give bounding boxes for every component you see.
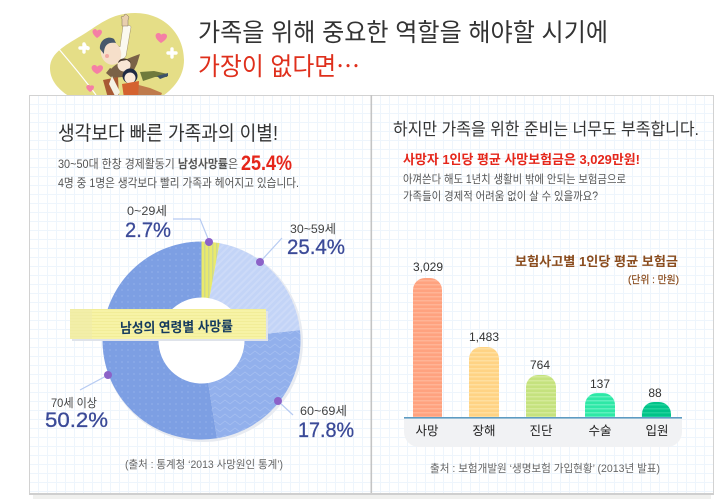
left intro text [58, 152, 299, 190]
bar chart [404, 260, 682, 447]
bar: diagnosis [526, 358, 556, 438]
left intro text: 25.4% [241, 152, 292, 175]
banner: male death rate by age: 남성의 연령별 사망률 [120, 318, 233, 336]
left source: (출처 : 통계청 ‘2013 사망원인 통계’) [125, 458, 283, 471]
chart title [515, 254, 679, 286]
callout: 60-69 [274, 397, 354, 442]
bar: disability: 1,483 [469, 330, 499, 344]
callout: 30-59: 25.4% [287, 236, 345, 259]
panel: right, insurance payouts [393, 120, 699, 475]
callout: 60-69: 17.8% [298, 419, 354, 442]
bar: death [413, 260, 443, 438]
callout: 30-59: 30~59세 [290, 222, 336, 236]
callout: 70 plus: 70세 이상 [51, 396, 97, 410]
title [198, 19, 608, 81]
callout: 70 plus: 50.2% [45, 409, 108, 432]
bar: surgery: 137 [590, 377, 610, 391]
bar: hospitalization [642, 386, 671, 438]
callout: 30-59 [256, 222, 345, 266]
bar: death: 3,029 [413, 260, 443, 274]
right source: 출처 : 보험개발원 ‘생명보험 가입현황’ (2013년 발표) [430, 462, 660, 475]
bar: hospitalization: 입원 [645, 424, 669, 438]
right intro text [403, 152, 640, 203]
right heading: 하지만 가족을 위한 준비는 너무도 부족합니다. [393, 120, 699, 139]
left heading: 생각보다 빠른 가족과의 이별! [58, 122, 278, 145]
callout: 0-29 [125, 204, 213, 246]
title: 가장이 없다면⋯ [198, 53, 360, 81]
bar: diagnosis: 진단 [529, 424, 553, 438]
banner: male death rate by age [70, 309, 268, 341]
donut chart [102, 241, 303, 442]
bar: disability [469, 330, 499, 438]
bar: death: 사망 [415, 424, 439, 438]
chart title: 보험사고별 1인당 평균 보험금 [515, 254, 678, 269]
callout: 0-29: 2.7% [125, 219, 171, 242]
illustration: family on a chair [50, 13, 184, 98]
right intro text: 아껴쓴다 해도 1년치 생활비 밖에 안되는 보험금으로 [403, 172, 626, 186]
left intro text: 4명 중 1명은 생각보다 빨리 가족과 헤어지고 있습니다. [58, 176, 299, 190]
bar: surgery: 수술 [588, 424, 612, 438]
bar: diagnosis: 764 [530, 358, 550, 372]
bar: surgery [585, 377, 615, 438]
panel: left, male death rate [45, 122, 354, 471]
bar: hospitalization: 88 [648, 386, 662, 400]
chart title: (단위 : 만원) [628, 273, 679, 286]
callout: 60-69: 60~69세 [300, 404, 347, 418]
bar: disability: 장해 [472, 424, 496, 438]
right intro text: 사망자 1인당 평균 사망보험금은 3,029만원! [403, 152, 640, 167]
left intro text: 30~50대 한창 경제활동기 남성사망률은 [58, 157, 238, 171]
panel: background card [29, 95, 714, 499]
right intro text: 가족들이 경제적 어려움 없이 살 수 있을까요? [403, 189, 598, 203]
callout: 0-29: 0~29세 [127, 204, 167, 218]
title: 가족을 위해 중요한 역할을 해야할 시기에 [198, 19, 608, 47]
callout: 70 plus [45, 371, 112, 432]
